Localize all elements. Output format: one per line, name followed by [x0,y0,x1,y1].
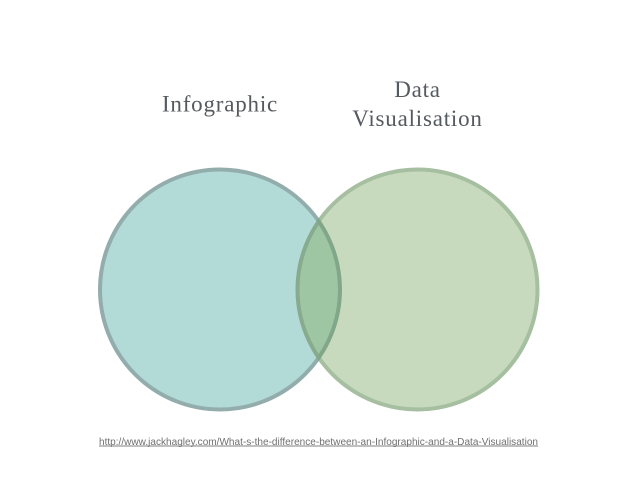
circle: Infographic [100,170,340,410]
source link: http://www.jackhagley.com/What-s-the-difference-between-an-Infographic-and-a-Data-Visualisation [99,437,538,448]
overlap region [296,218,342,361]
venn diagram infographic [98,82,540,447]
heading: Data Visualisation: Visualisation [352,106,483,131]
heading: Data Visualisation: Data [394,77,441,102]
heading: Data Visualisation [352,77,483,131]
circle: Data Visualisation [298,170,538,410]
heading: Infographic: Infographic [162,92,278,116]
